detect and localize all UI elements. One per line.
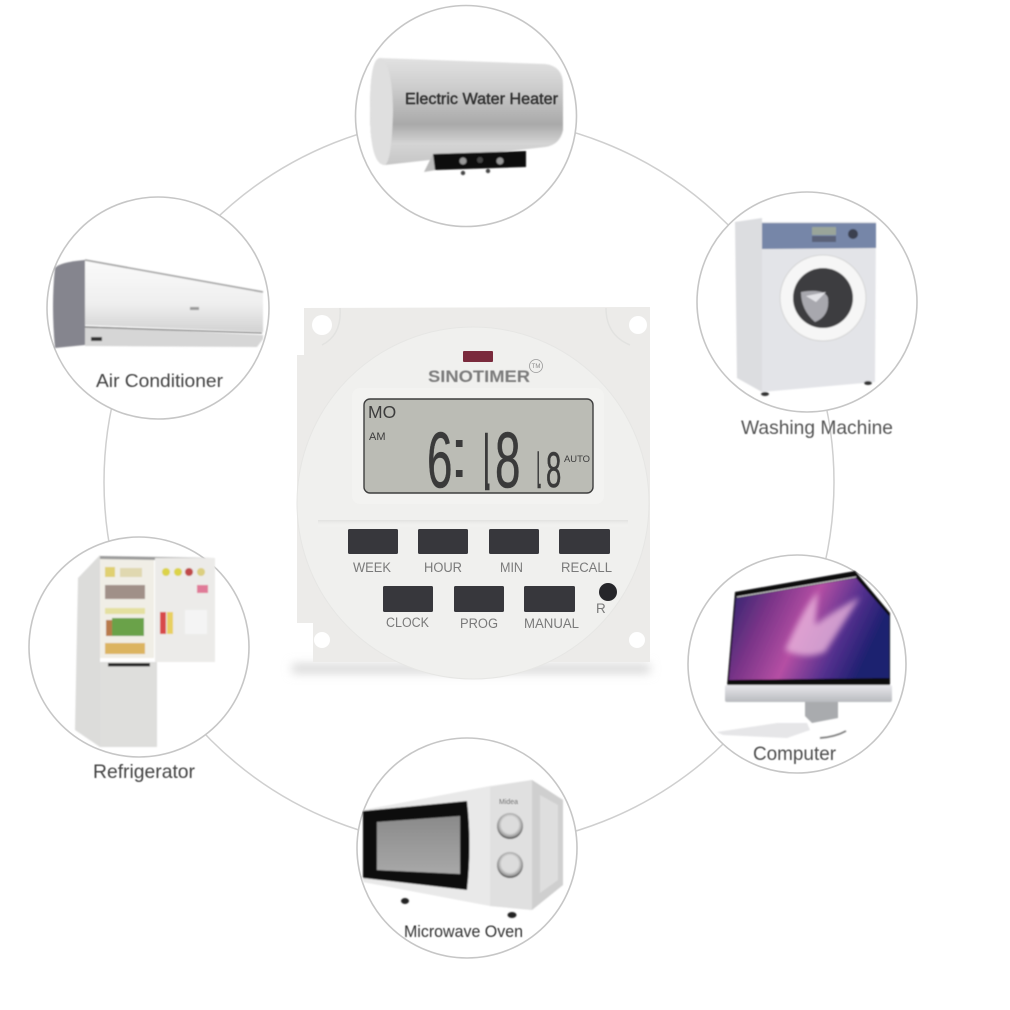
base corner lips bbox=[322, 308, 630, 345]
AUTO: AUTO bbox=[564, 454, 590, 465]
panel: electric water heater bbox=[356, 6, 576, 226]
button labels: RECALL bbox=[561, 560, 612, 575]
panel: microwave oven bbox=[357, 738, 577, 958]
device shadow bbox=[292, 664, 650, 673]
label: Midea brand: Midea bbox=[499, 799, 518, 806]
device square base bbox=[297, 307, 650, 662]
AM: AM bbox=[369, 431, 386, 443]
time digits: : bbox=[450, 414, 469, 492]
icon: air conditioner bbox=[53, 260, 263, 348]
trademark bbox=[530, 360, 542, 372]
reset button bbox=[599, 583, 617, 601]
round face bbox=[297, 327, 649, 679]
button labels: MIN bbox=[500, 560, 523, 575]
button labels: MANUAL bbox=[524, 616, 579, 631]
day: MO bbox=[368, 402, 396, 422]
button labels: WEEK bbox=[353, 560, 391, 575]
LCD screen bbox=[363, 398, 594, 494]
time digits bbox=[429, 432, 560, 490]
time digits: 8 bbox=[546, 441, 561, 498]
connecting ring bbox=[104, 117, 834, 847]
label: Washing Machine: Washing Machine bbox=[741, 417, 893, 439]
label: Electric Water Heater: Electric Water Heater bbox=[405, 91, 559, 108]
panel: computer bbox=[688, 555, 906, 773]
time digits: 6 bbox=[427, 416, 452, 504]
label: Microwave Oven: Microwave Oven bbox=[404, 923, 523, 941]
label: Refrigerator: Refrigerator bbox=[93, 761, 195, 783]
icon: desktop computer bbox=[717, 571, 892, 738]
time digits: 1 bbox=[530, 440, 545, 499]
lower panel shade bbox=[318, 520, 628, 528]
indicator LED bbox=[463, 351, 493, 362]
panel: washing machine bbox=[697, 192, 917, 439]
panel: air conditioner bbox=[47, 197, 269, 419]
brand name: SINOTIMER bbox=[428, 368, 530, 386]
mounting holes bbox=[312, 315, 647, 648]
LCD bezel bbox=[352, 388, 604, 504]
icon: water heater bbox=[370, 58, 563, 175]
time digits: 1 bbox=[472, 417, 497, 509]
trademark: TM bbox=[532, 364, 540, 370]
panel: SINOTIMER digital timer bbox=[292, 307, 650, 679]
icon: microwave oven bbox=[363, 780, 563, 918]
button labels bbox=[353, 560, 612, 631]
button labels: PROG bbox=[460, 616, 498, 631]
button labels: R bbox=[596, 601, 606, 616]
label: Air Conditioner: Air Conditioner bbox=[96, 370, 223, 391]
button labels: HOUR bbox=[424, 560, 462, 575]
panel: refrigerator bbox=[29, 537, 249, 783]
icon: refrigerator bbox=[75, 555, 215, 747]
icon: washing machine bbox=[735, 218, 876, 396]
buttons bbox=[348, 529, 610, 612]
button labels: CLOCK bbox=[386, 615, 429, 630]
label: Computer: Computer bbox=[753, 744, 837, 765]
time digits: 8 bbox=[495, 416, 520, 504]
